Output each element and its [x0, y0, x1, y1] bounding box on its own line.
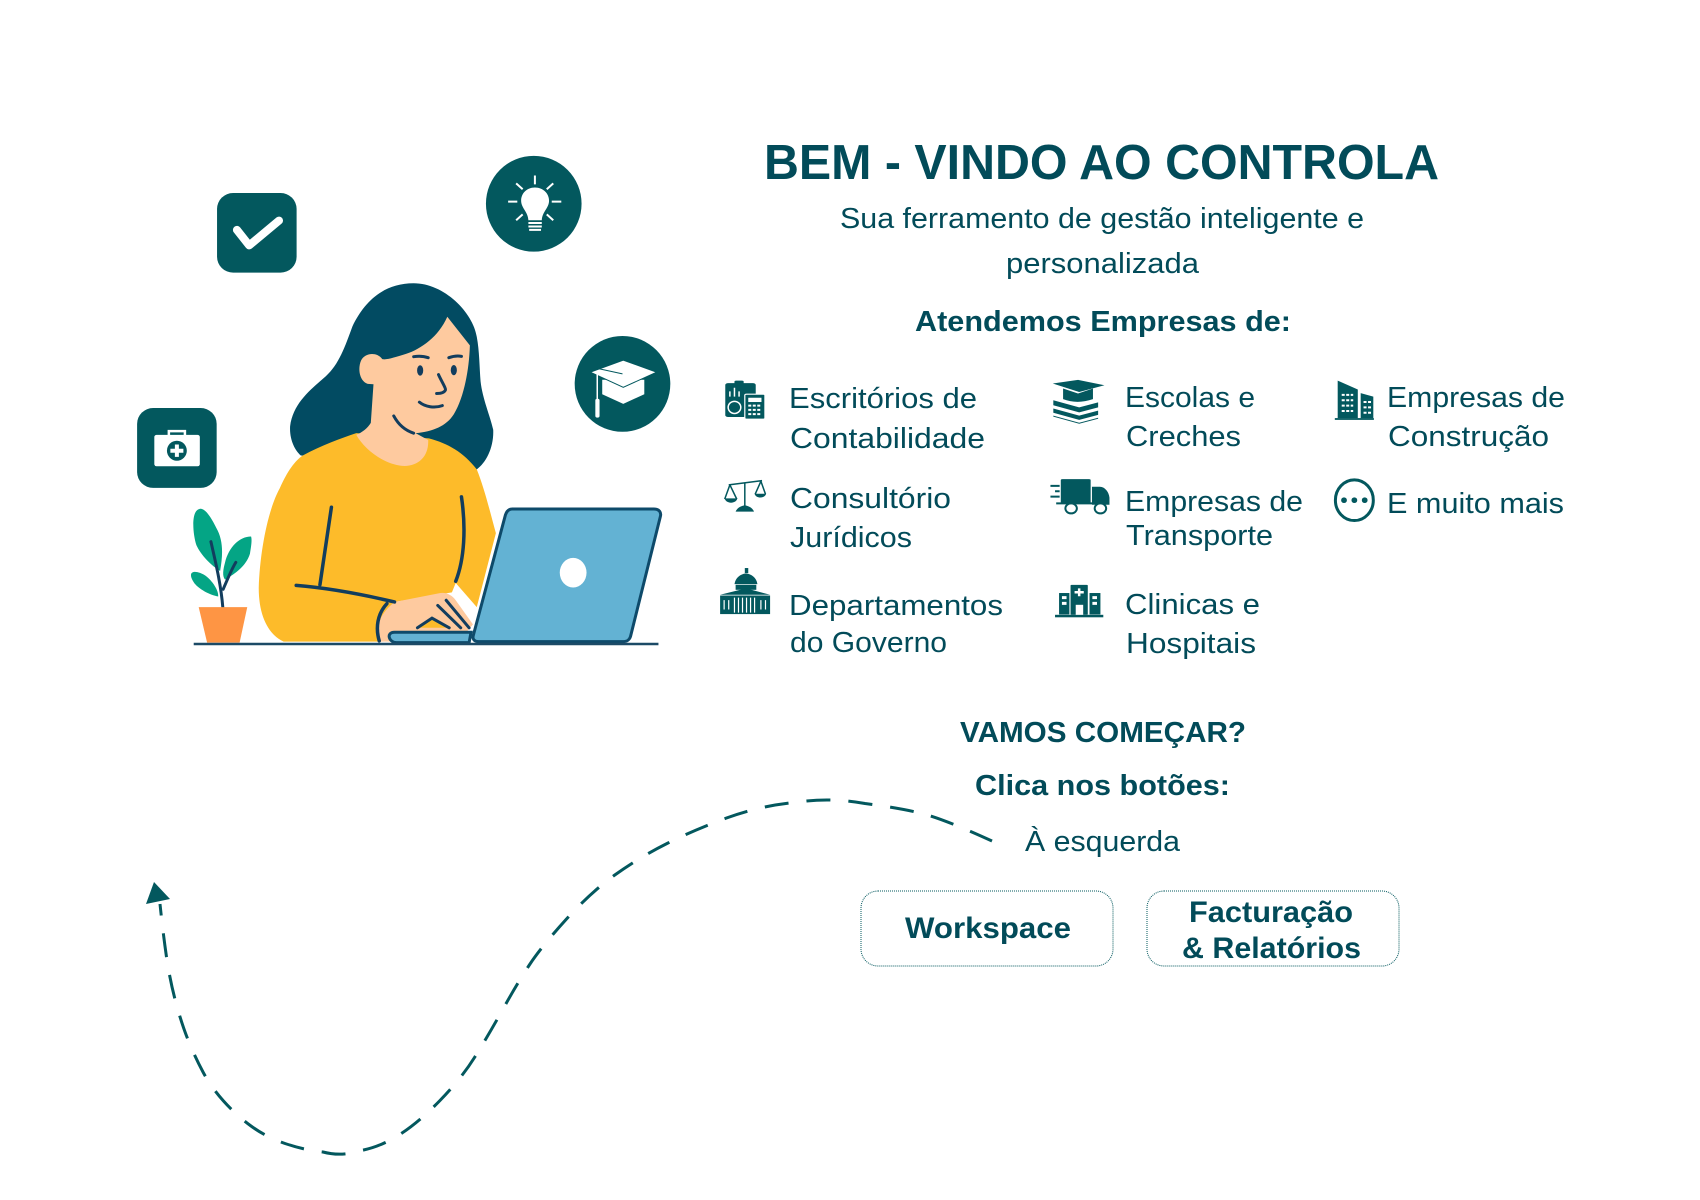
sleeve lines	[296, 497, 464, 641]
icon: hospital building	[1055, 585, 1103, 617]
icon: scales of justice	[725, 481, 766, 512]
illustration: woman working at laptop with floating icons	[137, 156, 670, 644]
heading: Clica nos botões: Clica nos botões:	[975, 770, 1230, 802]
subtitle: personalizada	[1006, 248, 1199, 280]
label: Empresas de Construção: Construção	[1388, 421, 1549, 453]
face and neck	[356, 317, 470, 466]
label: Empresas de Transporte	[1125, 486, 1303, 552]
icon: light bulb badge	[486, 156, 582, 252]
button: Facturação & Relatórios	[1147, 891, 1399, 966]
item: and much more	[1335, 480, 1564, 521]
title: BEM - VINDO AO CONTROLA	[764, 136, 1439, 190]
label: Departamentos do Governo: Departamentos	[789, 590, 1003, 622]
label: Clinicas e Hospitais: Hospitais	[1126, 628, 1256, 660]
desk line	[194, 643, 658, 645]
label: Empresas de Transporte: Empresas de	[1125, 486, 1303, 518]
label: Escritórios de Contabilidade: Escritórios de	[789, 383, 977, 415]
icon: capitol building	[720, 568, 770, 614]
label: Escritórios de Contabilidade	[789, 383, 985, 455]
subtitle: Sua ferramento de gestão inteligente e	[840, 203, 1364, 235]
icon: check mark badge	[217, 193, 297, 273]
icon: ellipsis circle	[1335, 480, 1373, 521]
icon: clipboard and calculator	[725, 381, 765, 419]
label: E muito mais: E muito mais	[1387, 488, 1564, 520]
label: Escolas e Creches: Creches	[1126, 421, 1241, 453]
arrow: dashed curved path pointing to left menu	[146, 800, 992, 1154]
label: Escolas e Creches	[1125, 382, 1255, 453]
item: accounting offices	[725, 381, 985, 455]
heading: companies served: Atendemos Empresas de:	[915, 306, 1291, 338]
plant in orange pot	[191, 509, 252, 643]
icon: medical kit badge	[137, 408, 217, 488]
label: Clinicas e Hospitais	[1125, 589, 1260, 660]
woman figure	[259, 283, 496, 642]
label: Consultório Jurídicos: Jurídicos	[790, 522, 912, 554]
icon: graduation cap on books	[1053, 380, 1104, 424]
item: construction companies	[1335, 381, 1565, 453]
icon: graduation cap badge	[575, 336, 670, 432]
label: Empresas de Construção: Empresas de	[1387, 382, 1565, 414]
label: Empresas de Construção	[1387, 382, 1565, 453]
facial features	[394, 356, 461, 433]
label: Empresas de Transporte: Transporte	[1126, 520, 1273, 552]
item: transport companies	[1050, 479, 1303, 552]
label: Departamentos do Governo: do Governo	[790, 627, 947, 659]
label: Departamentos do Governo	[789, 590, 1003, 659]
hair	[290, 283, 493, 469]
item: clinics and hospitals	[1055, 585, 1260, 660]
list of company types	[720, 380, 1565, 660]
label: Escritórios de Contabilidade: Contabilidade	[790, 423, 985, 455]
item: government departments	[720, 568, 1003, 659]
subtitle	[840, 203, 1364, 280]
label: Clinicas e Hospitais: Clinicas e	[1125, 589, 1260, 621]
hand on keyboard	[378, 593, 473, 642]
icon: buildings	[1335, 381, 1374, 420]
button: Facturação & Relatórios: Facturação	[1189, 896, 1353, 929]
text: À esquerda: À esquerda	[1025, 826, 1180, 858]
laptop	[389, 509, 661, 643]
item: schools and nurseries	[1053, 380, 1255, 453]
heading: Vamos começar: VAMOS COMEÇAR?	[960, 717, 1246, 749]
button: Workspace	[861, 891, 1113, 966]
button: Workspace: Workspace	[905, 912, 1071, 945]
item: legal practices	[725, 481, 951, 554]
label: Escolas e Creches: Escolas e	[1125, 382, 1255, 414]
label: Consultório Jurídicos	[790, 483, 951, 554]
sweater	[259, 433, 496, 642]
button: Facturação & Relatórios: & Relatórios	[1182, 932, 1361, 965]
label: Consultório Jurídicos: Consultório	[790, 483, 951, 515]
icon: delivery truck	[1050, 479, 1108, 513]
